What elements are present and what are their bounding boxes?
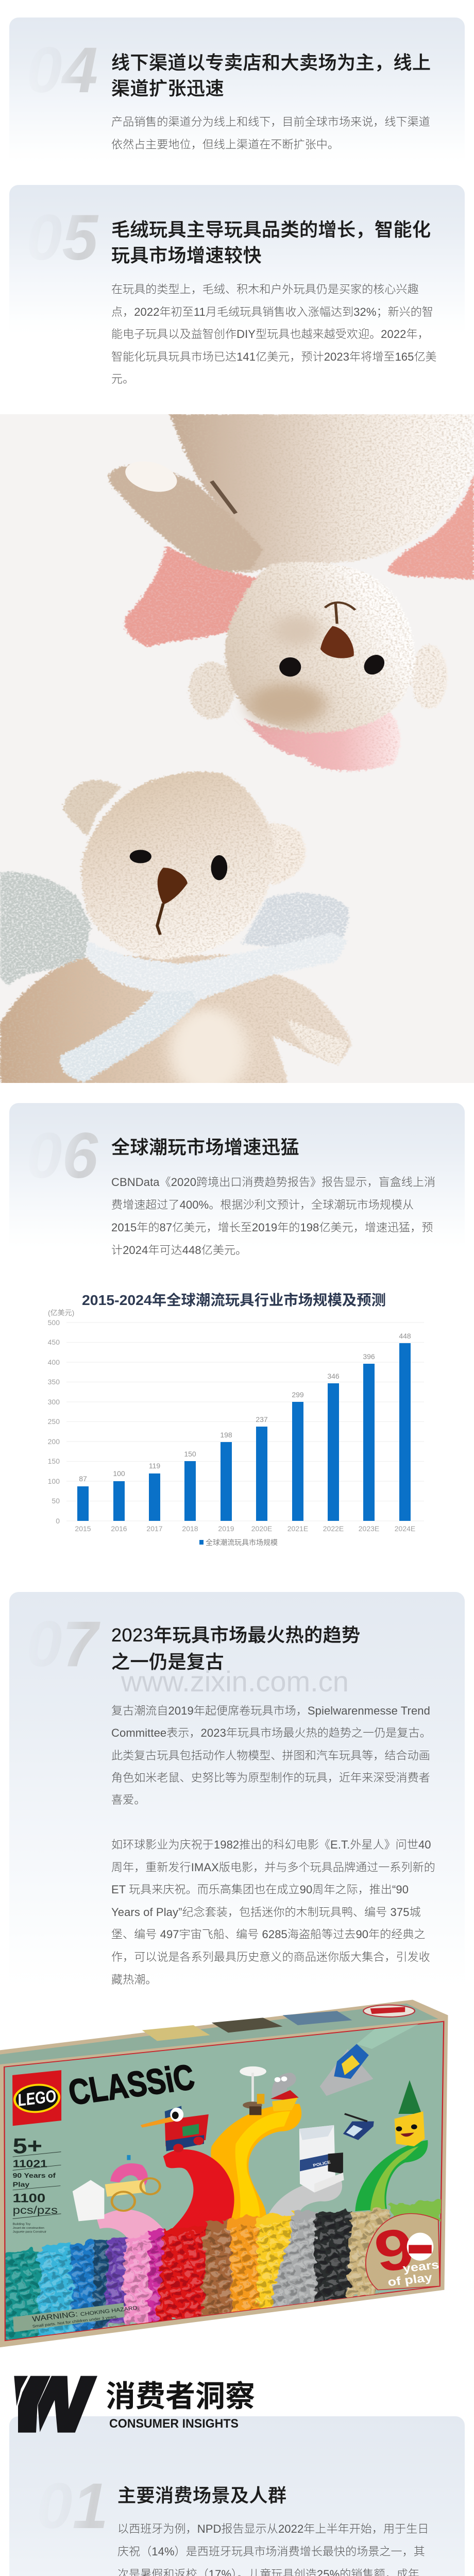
y axis: 150 [48,1457,60,1465]
value labels [79,1332,411,1483]
text block 07 paragraph 1: 角色如米老鼠、史努比等为原型制作的玩具，近年来深受消费者 [111,1771,430,1784]
upper bear eye left [279,657,301,676]
box info: age, set number, pieces: 1100 [13,2191,45,2205]
choking warning [13,2303,140,2332]
text block 07 paragraph 2: ET 玩具来庆祝。而乐高集团也在成立90周年之际，推出“90 [111,1883,409,1896]
text block 07 paragraph 1 [111,1704,431,1806]
rainbow arc: red [163,2149,234,2239]
heading 05: 毛绒玩具主导玩具品类的增长，智能化 [111,219,431,240]
pink scarf lower [245,709,400,771]
text block 07 paragraph 1: 喜爱。 [111,1793,145,1806]
text block 06: 计2024年可达448亿美元。 [111,1244,247,1257]
duck toy [141,2106,209,2153]
value labels: 346 [327,1372,340,1380]
text block 06: CBNData《2020跨境出口消费趋势报告》报告显示，盲盒线上消 [111,1176,435,1189]
helicopter toy [343,2114,374,2140]
scarf band [86,933,348,1002]
year labels: 2021E [287,1524,308,1533]
y axis: 100 [48,1477,60,1485]
anniversary badge: years [402,2259,440,2275]
year labels: 2018 [182,1524,198,1533]
panel: 01 consumption scenarios [9,2416,465,2576]
LEGO logo: LEGO [16,2087,58,2110]
text block 07 paragraph 1: 此类复古玩具包括动作人物模型、拼图和汽车玩具等，结合动画 [111,1749,430,1762]
text block 04: 产品销售的渠道分为线上和线下，目前全球市场来说，线下渠道 [111,115,430,128]
number 04: 04 [26,35,98,106]
year labels: 2017 [146,1524,163,1533]
flap thumbnails [142,2005,415,2041]
year labels: 2019 [218,1524,234,1533]
heading 04: 线下渠道以专卖店和大卖场为主，线上 [111,52,431,73]
panel: 04 offline channels [9,18,465,163]
number 07: 07 [26,1608,98,1680]
rainbow arc: green [355,2140,428,2211]
ear left [63,780,121,836]
box info: age, set number, pieces: pcs/pzs [13,2205,58,2216]
text block 06: 费增速超过了400%。根据沙利文预计，全球潮玩市场规模从 [111,1198,414,1211]
upper bear eye right [361,653,388,676]
section heading: consumer insights [14,2376,255,2433]
heading zh: 消费者洞察 [106,2380,255,2413]
tan chin patch [248,684,327,725]
bear body [0,955,351,1084]
value labels: 100 [113,1469,125,1478]
lower bear mouth [157,904,163,935]
left paw [119,455,183,498]
text block 07 paragraph 2: 如环球影业为庆祝于1982推出的科幻电影《E.T.外星人》问世40 [111,1838,431,1851]
scarf tail [60,991,196,1082]
value labels: 448 [399,1332,411,1340]
box info: age, set number, pieces: Building Toy [13,2223,30,2226]
belly [170,1008,248,1093]
heading 04: 渠道扩张迅速 [111,78,224,99]
ear right [411,645,447,709]
heading 07 [111,1624,361,1672]
choking warning: WARNING: CHOKING HAZARD. [31,2303,140,2324]
y axis: 350 [48,1378,60,1386]
bars [77,1343,411,1521]
police station toy [299,2125,344,2193]
number 01: 01 [37,2470,108,2542]
heading 04 [111,52,431,99]
arm crease [212,481,236,513]
text block 01 paragraph 1: 以西班牙为例，NPD报告显示从2022年上半年开始，用于生日 [117,2522,429,2535]
pineapple toy [395,2080,425,2146]
heading 07: 2023年玩具市场最火热的趋势 [111,1624,361,1646]
text block 07 paragraph 2 [111,1838,435,1986]
number 05: 05 [26,202,98,274]
bar chart: market size 2015-2024 [47,1292,424,1547]
y axis: 500 [48,1318,60,1327]
panel: 05 plush toys [9,185,465,334]
box outer [0,1999,448,2347]
text block 05: 能电子玩具以及益智创作DIY型玩具也越来越受欢迎。2022年， [111,328,429,341]
rainbow arc: light green [370,2146,419,2211]
heading 01: 主要消费场景及人群 [117,2485,287,2506]
box info: age, set number, pieces: Juguete para Construir [13,2231,46,2233]
year labels: 2016 [111,1524,127,1533]
value labels: 150 [184,1450,196,1458]
text block 07 paragraph 2: 周年，重新发行IMAX版电影，并与多个玩具品牌通过一系列新的 [111,1861,435,1874]
text block 07 paragraph 2: 作，可以说是各系列最具历史意义的商品迷你版大集合，引发收 [111,1951,430,1963]
brick pile [0,2200,442,2344]
unit label: (亿美元) [48,1309,74,1317]
text block 07 paragraph 2: Years of Play”纪念套装，包括迷你的木制玩具鸭、编号 375城 [111,1906,421,1919]
rainbow arc: pink [97,2210,170,2244]
y axis: 200 [48,1437,60,1446]
legend: 全球潮流玩具市场规模 [206,1538,278,1547]
pink scarf left [125,546,257,647]
icon: W logo [14,2376,97,2433]
y axis: 450 [48,1338,60,1346]
text block 05: 在玩具的类型上，毛绒、积木和户外玩具仍是买家的核心兴趣 [111,283,419,296]
value labels: 198 [220,1431,232,1439]
CLASSIC title: CLASSiC [65,2057,198,2113]
year labels [75,1524,415,1533]
photo: two plush teddy bears [0,414,474,1083]
value labels: 87 [79,1475,87,1483]
text block 07 paragraph 2: 藏热潮。 [111,1973,157,1986]
elephant and parasol toy [240,2066,299,2115]
text block 04 [111,115,430,151]
text block 05 [111,283,437,385]
chart title: 2015-2024年全球潮流玩具行业市场规模及预测 [82,1292,386,1308]
text block 06 [111,1176,435,1257]
head [225,562,415,733]
text block 04: 依然占主要地位，但线上渠道在不断扩张中。 [111,138,339,151]
watermark: www.zixin.com.cn [121,1665,349,1698]
text block 01 paragraph 1 [117,2522,429,2576]
number 06: 06 [26,1120,98,1192]
value labels: 396 [363,1352,375,1361]
text block 07 paragraph 1: 复古潮流自2019年起便席卷玩具市场，Spielwarenmesse Trend [111,1704,430,1717]
heading en: CONSUMER INSIGHTS [109,2417,239,2431]
lower bear eye right [211,855,227,880]
box info: age, set number, pieces: 90 Years of [13,2172,56,2180]
pink scarf right [387,474,474,580]
box top flap [0,2004,438,2064]
y axis: 400 [48,1358,60,1366]
rainbow arc: yellow [211,2104,301,2224]
rainbow arc: yellow inner [235,2111,290,2224]
heading 05: 玩具市场增速较快 [111,245,262,266]
spaceship toy [320,2024,419,2096]
box info: age, set number, pieces: 11021 [13,2158,47,2170]
y axis: 250 [48,1417,60,1426]
police station toy: POLICE [312,2160,331,2167]
y axis [48,1318,60,1525]
box info: age, set number, pieces: Jouet de construction [13,2227,44,2230]
text block 05: 智能化玩具玩具市场已达141亿美元，预计2023年将增至165亿美 [111,350,437,363]
value labels: 299 [292,1391,304,1399]
bear body [170,414,474,572]
heading 05 [111,219,431,266]
box info: age, set number, pieces [13,2134,61,2233]
text block 07 paragraph 1: Committee表示，2023年玩具市场最火热的趋势之一仍是复古。 [111,1726,431,1739]
value labels: 119 [149,1462,160,1470]
muzzle [272,615,320,647]
text block 06: 2015年的87亿美元，增长至2019年的198亿美元，增速迅猛，预 [111,1221,433,1234]
anniversary badge: 9 [370,2216,419,2284]
LEGO logo [11,2070,63,2126]
photo: LEGO Classic 90 Years of Play box [0,2000,448,2347]
lower bear eye left [130,850,151,863]
ear right [266,823,306,886]
anniversary badge: of play [387,2272,433,2289]
text block 07 paragraph 2: 堡、编号 497宇宙飞船、编号 6285海盗船等过去90年的经典之 [111,1928,426,1941]
paw [287,1020,348,1064]
lower bear [0,772,351,1093]
text block 05: 元。 [111,372,134,385]
grey wing left [0,872,91,986]
upper bear [109,414,474,771]
box info: age, set number, pieces: Play [13,2181,29,2189]
text block 01 paragraph 1: 庆祝（14%）是西班牙玩具市场消费增长最快的场景之一，其 [117,2545,425,2558]
upper bear nose [320,626,354,658]
year labels: 2023E [359,1524,379,1533]
panel: 06 trendy toys market [9,1103,465,1248]
box front [4,2022,444,2341]
left arm [109,464,263,571]
y axis: 300 [48,1398,60,1406]
year labels: 2024E [395,1524,415,1533]
upper bear mouth [325,602,355,624]
y axis: 0 [56,1517,60,1525]
heading 07: 之一仍是复古 [111,1651,224,1672]
heading 06: 全球潮玩市场增速迅猛 [111,1137,299,1158]
year labels: 2015 [75,1524,91,1533]
y axis: 50 [52,1497,60,1505]
ear left [189,662,234,719]
year labels: 2022E [323,1524,344,1533]
anniversary badge [366,2214,440,2290]
head [81,772,274,959]
box info: age, set number, pieces: 5+ [13,2134,42,2158]
panel: 07 retro trend [9,1592,465,1989]
choking warning: Small parts. Not for children under 3 years. [32,2314,118,2329]
lower bear nose [158,868,188,905]
grey wing right [242,893,348,959]
year labels: 2020E [251,1524,272,1533]
value labels: 237 [256,1415,268,1423]
carriage toy [73,2155,160,2221]
text block 05: 点，2022年初至11月毛绒玩具销售收入涨幅达到32%；新兴的智 [111,306,433,318]
rainbow arc: grey [267,2180,342,2219]
